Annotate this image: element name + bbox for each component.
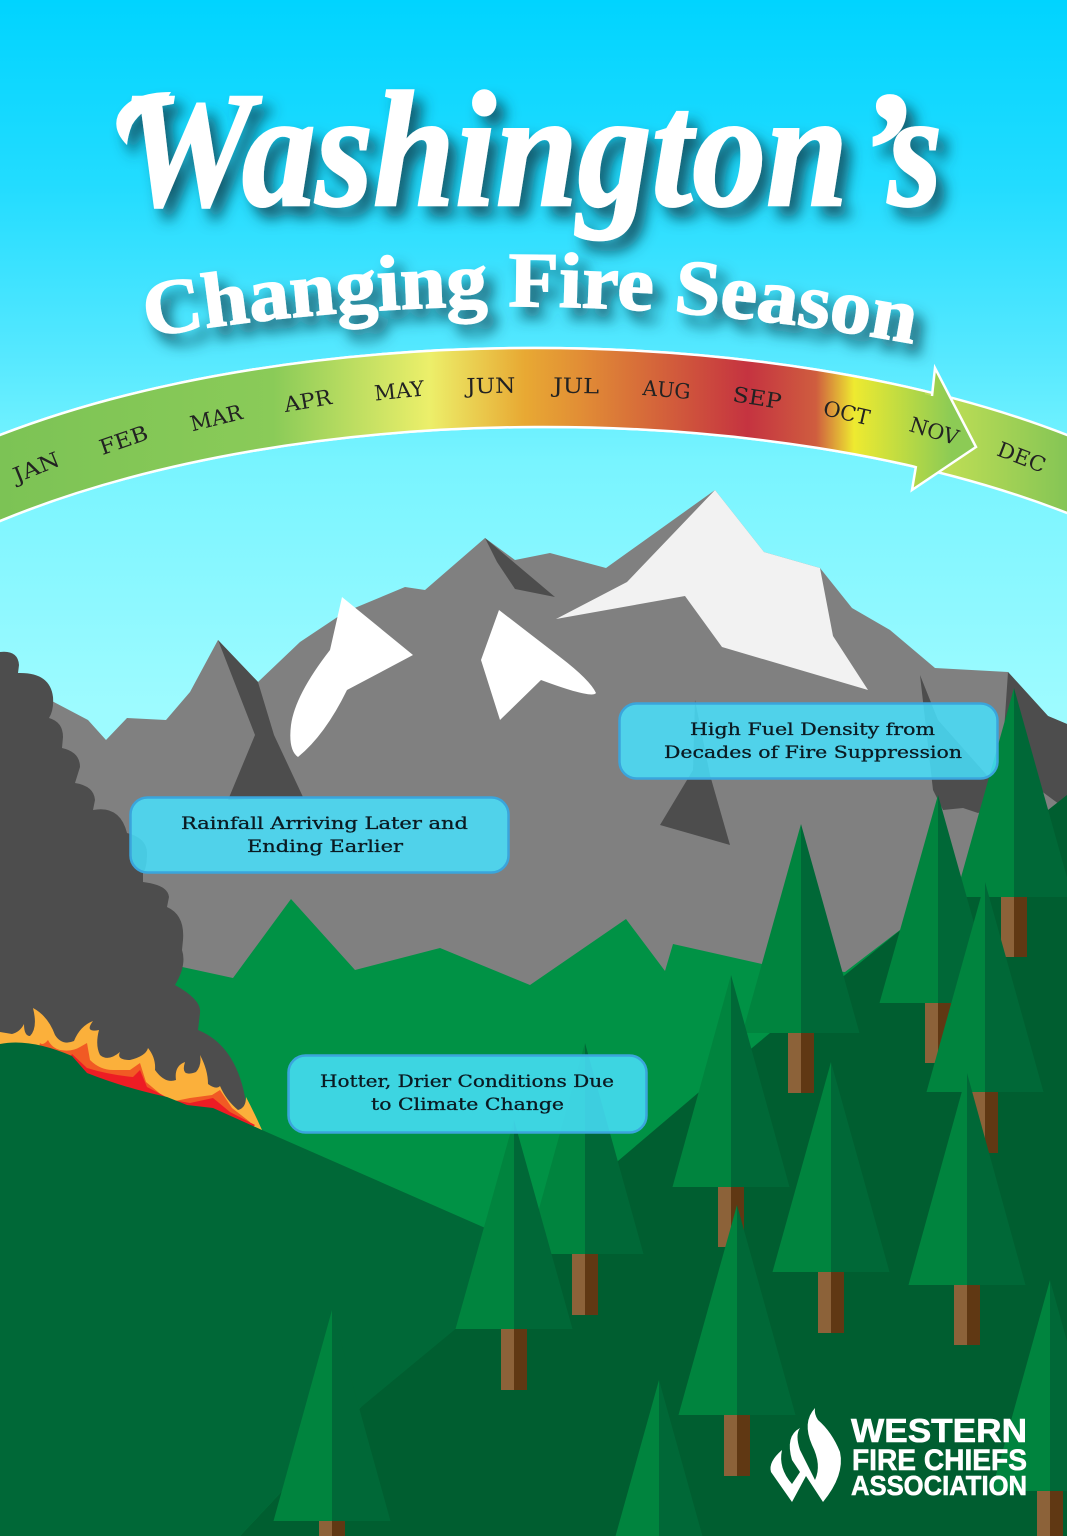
month labels: SEP xyxy=(731,382,783,414)
mountains xyxy=(0,490,1067,1010)
tree xyxy=(616,1380,702,1536)
callout: fuel density xyxy=(620,704,998,778)
tree xyxy=(926,882,1044,1153)
month labels: JAN xyxy=(8,447,63,488)
dark green forest slope xyxy=(240,795,1067,1536)
logo wordmark: ASSOCIATION xyxy=(851,1470,1027,1501)
tree xyxy=(274,1310,390,1536)
tree xyxy=(908,1073,1026,1345)
callout: rainfall: Ending Earlier xyxy=(247,837,404,857)
callout: climate xyxy=(288,1056,646,1132)
tree xyxy=(992,1280,1067,1536)
logo: Western Fire Chiefs Association xyxy=(770,1408,1027,1502)
callout: fuel density: High Fuel Density from xyxy=(690,720,935,740)
month labels: AUG xyxy=(641,376,692,404)
arc band: fire season gradient xyxy=(0,346,925,522)
month labels: FEB xyxy=(96,421,151,460)
month labels xyxy=(8,374,1049,488)
month labels: MAY xyxy=(373,376,427,406)
subtitle: Changing Fire Season xyxy=(144,252,933,364)
callout: rainfall: Rainfall Arriving Later and xyxy=(181,814,468,834)
smoke plume xyxy=(0,652,250,1125)
tree xyxy=(526,1043,644,1315)
trees xyxy=(274,688,1067,1536)
logo wordmark: FIRE CHIEFS xyxy=(852,1444,1027,1477)
tree xyxy=(456,1120,572,1390)
title: ’ xyxy=(856,58,911,241)
wildfire flames xyxy=(0,1008,262,1150)
callout: rainfall xyxy=(130,798,508,872)
tree xyxy=(880,795,996,1063)
callout: climate: Hotter, Drier Conditions Due xyxy=(320,1072,614,1092)
month labels: APR xyxy=(281,385,335,417)
foreground hill xyxy=(0,1042,545,1536)
arrowhead xyxy=(880,368,976,490)
tree xyxy=(672,975,790,1247)
tree xyxy=(772,1062,890,1333)
tree xyxy=(678,1205,796,1476)
callout: fuel density: Decades of Fire Suppression xyxy=(664,743,962,763)
month labels: JUN xyxy=(464,374,516,398)
arc band: December tail xyxy=(0,348,1067,536)
tree xyxy=(956,688,1067,957)
callout: climate: to Climate Change xyxy=(371,1095,564,1115)
month labels: MAR xyxy=(188,400,246,436)
back green ridge xyxy=(0,800,1067,1536)
month labels: DEC xyxy=(994,437,1049,478)
tree xyxy=(742,824,860,1093)
month timeline arc xyxy=(0,348,1067,536)
month labels: OCT xyxy=(821,396,872,430)
icon: flame W xyxy=(770,1408,841,1502)
logo wordmark xyxy=(851,1412,1027,1501)
month labels: JUL xyxy=(551,374,599,398)
title: Washington xyxy=(122,58,848,241)
title: s xyxy=(887,58,942,241)
logo wordmark: WESTERN xyxy=(851,1412,1027,1449)
month labels: NOV xyxy=(907,413,962,450)
